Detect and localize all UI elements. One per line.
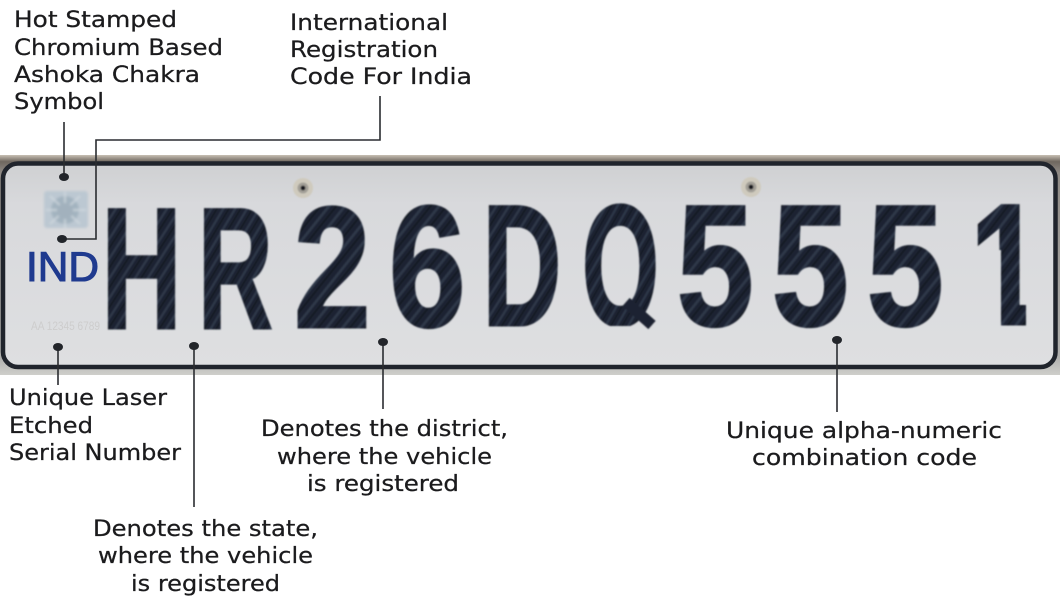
text block: laser etched serial number: Etched [9,414,93,439]
text block: international registration code: Code For India [290,65,472,90]
registration characters: 5 [677,170,754,363]
text block: state [93,517,318,596]
text block: district: where the vehicle [277,445,492,470]
text block: district: is registered [307,472,459,497]
IND code: IND [26,243,99,290]
text block: laser etched serial number: Unique Laser [9,386,168,411]
laser etched serial number: AA 12345 6789 [31,319,100,333]
registration characters: Q [582,169,659,362]
registration characters: 2 [294,172,371,365]
icon: right mounting bolt [741,177,761,197]
callout: serial number leader [53,343,63,385]
registration characters: 5 [867,170,944,363]
callout: chakra symbol leader [59,122,69,181]
text block: Ashoka Chakra symbol: Chromium Based [14,36,223,61]
text block: international registration code [290,11,472,90]
callout: state leader [189,342,199,507]
text block: alpha-numeric code: combination code [752,446,977,471]
registration characters: 1 [970,170,1043,361]
icon: chromium Ashoka Chakra hologram [44,191,88,228]
icon: left mounting bolt [293,178,313,198]
panel: number plate [0,155,1060,375]
text block: alpha-numeric code [726,419,1002,471]
text block: state: Denotes the state, [93,517,318,542]
text block: international registration code: Registration [290,38,438,63]
registration characters: 6 [389,171,466,364]
registration characters: D [482,170,561,362]
text block: laser etched serial number [9,386,182,466]
callout: IND code leader [57,96,380,243]
text block: district [261,417,508,497]
plate body with black border [3,164,1056,367]
text block: Ashoka Chakra symbol: Ashoka Chakra [14,63,200,88]
registration characters: H [102,172,182,365]
callout: district leader [378,338,388,409]
text block: district: Denotes the district, [261,417,508,442]
registration characters [106,202,1027,330]
text block: international registration code: International [290,11,448,36]
text block: Ashoka Chakra symbol: Hot Stamped [14,8,177,33]
registration characters: R [198,174,273,366]
text block: laser etched serial number: Serial Number [9,441,182,466]
text block: state: where the vehicle [98,544,313,569]
text block: alpha-numeric code: Unique alpha-numeric [726,419,1002,444]
plate backdrop [0,155,1060,375]
text block: Ashoka Chakra symbol [14,8,223,115]
callout: alpha-numeric leader [832,336,842,412]
registration characters: 5 [772,170,849,363]
text block: Ashoka Chakra symbol: Symbol [14,90,104,115]
